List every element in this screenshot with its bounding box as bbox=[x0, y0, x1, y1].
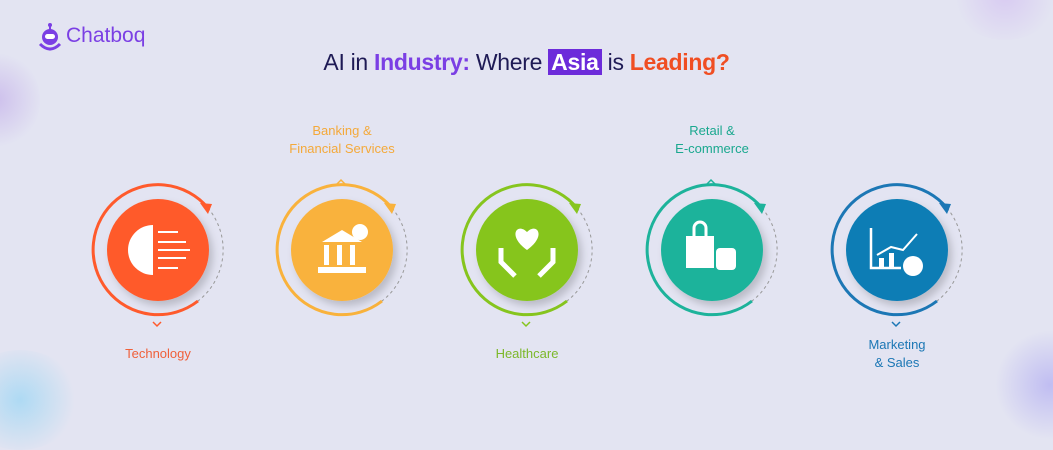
item: banking bbox=[277, 180, 407, 315]
label: retail: Retail & bbox=[689, 123, 735, 138]
label: banking bbox=[289, 123, 395, 156]
label: banking: Financial Services bbox=[289, 141, 395, 156]
item: healthcare bbox=[462, 185, 592, 326]
logo: Chatboq bbox=[66, 24, 145, 47]
logo bbox=[39, 23, 145, 51]
label: retail: E-commerce bbox=[675, 141, 749, 156]
label: marketing: & Sales bbox=[875, 355, 919, 370]
label: banking: Banking & bbox=[312, 123, 372, 138]
background glows bbox=[0, 50, 40, 150]
item: technology bbox=[93, 185, 223, 326]
label: marketing bbox=[868, 337, 926, 370]
item: retail bbox=[647, 180, 777, 315]
label: technology: Technology bbox=[125, 346, 191, 361]
title: AI in Industry: Where Asia is Leading? bbox=[323, 49, 730, 75]
label: healthcare: Healthcare bbox=[496, 346, 558, 361]
label: marketing: Marketing bbox=[868, 337, 926, 352]
label: retail bbox=[675, 123, 749, 156]
item: marketing bbox=[832, 185, 962, 326]
